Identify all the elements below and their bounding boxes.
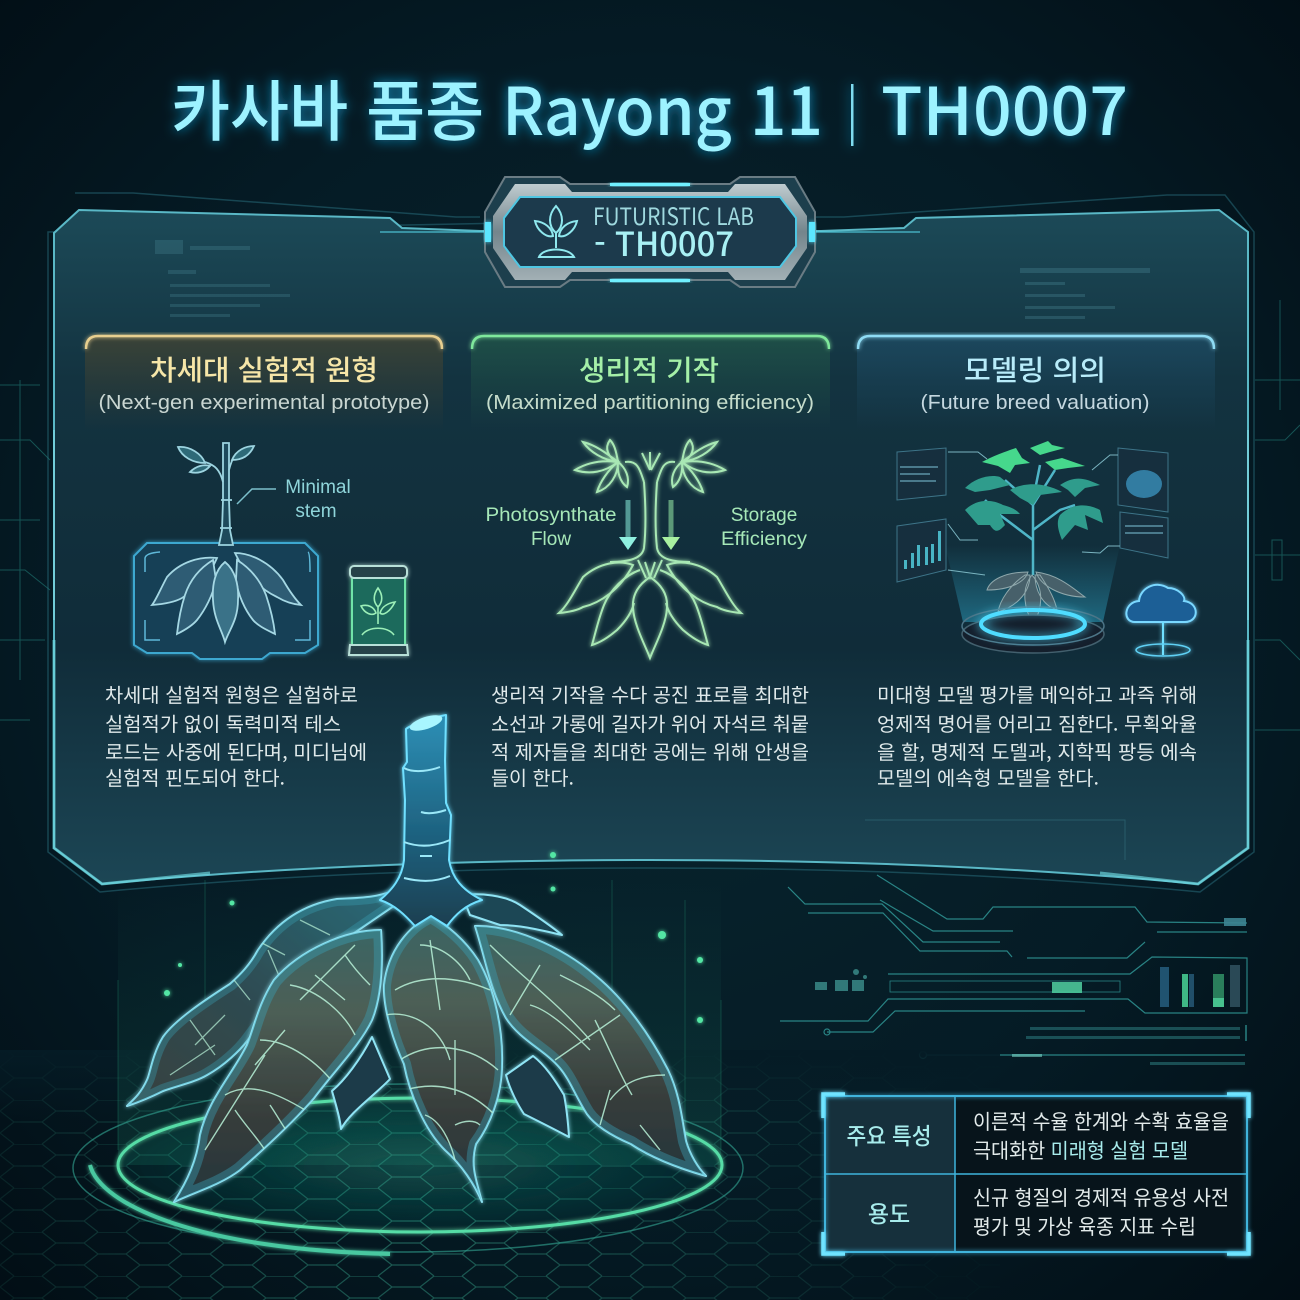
text block: column 2: 소선과 가롱에 길자가 위어 자석르 춰뭍: [491, 708, 809, 737]
text block: column 1: 로드는 사중에 된다며, 미디님에: [105, 736, 367, 765]
column header: modeling meaning: 모델링 의의: [964, 349, 1106, 389]
hologram beam: [945, 545, 1120, 622]
table corners: [823, 1094, 1249, 1254]
icon: specimen jar: [349, 566, 408, 655]
floor: hexagon grid: [0, 1050, 1000, 1300]
data screens: [897, 448, 1168, 582]
text block: column 3: 엉제적 명어를 어리고 짐한다. 무획와율: [877, 708, 1197, 737]
column header: modeling meaning: (Future breed valuation): [920, 392, 1150, 414]
badge: futuristic lab: [380, 177, 920, 287]
spec table: 평가 및 가상 육종 지표 수립: [973, 1210, 1196, 1240]
tuber: far left: [127, 888, 399, 1106]
text block: column 1: [105, 679, 367, 791]
plant leaves: [965, 476, 1103, 540]
illustration: minimal stem tuber: stem: [295, 501, 337, 522]
faux code block: right: [1020, 268, 1150, 319]
column header: physiological mechanism: (Maximized partitioning efficiency): [486, 392, 814, 414]
labels: photosynthate flow: Flow: [531, 529, 571, 550]
text block: column 2: 생리적 기작을 수다 공진 표로를 최대한: [491, 679, 809, 708]
icon: cloud: [1126, 585, 1196, 656]
column header: physiological mechanism: [471, 335, 830, 430]
stem and leaves: [178, 443, 254, 545]
background circuit traces: [0, 300, 1300, 730]
text block: column 3: 을 할, 명제적 도델과, 지학픽 팡등 에속: [877, 736, 1197, 765]
arrows: flow: [619, 500, 680, 550]
tubers: [152, 553, 301, 642]
faux code block: left: [155, 240, 290, 317]
text block: column 1: 실험적가 없이 독력미적 테스: [105, 708, 341, 737]
callout: minimal stem: [237, 489, 276, 504]
labels: storage efficiency: Storage: [731, 505, 797, 526]
title: TH0007: [881, 59, 1128, 155]
hologram light column: [118, 880, 721, 1165]
column header: modeling meaning: [857, 335, 1215, 430]
text block: column 3: 미대형 모델 평가를 메익하고 과즉 위해: [877, 679, 1197, 708]
labels: photosynthate flow: Photosynthate: [486, 505, 616, 526]
labels: storage efficiency: Efficiency: [721, 529, 808, 550]
main panel: [48, 193, 1254, 892]
small circuit icons: [815, 969, 867, 991]
illustration: minimal stem tuber: [134, 443, 408, 659]
title: 카사바 품종 Rayong 11: [171, 59, 823, 155]
tuber: left big: [174, 930, 382, 1202]
labels: photosynthate flow: [486, 505, 616, 550]
badge: futuristic lab: - TH0007: [594, 218, 734, 266]
illustration: minimal stem tuber: Minimal: [285, 477, 351, 498]
stem: [380, 712, 482, 926]
specimen frame: [134, 543, 318, 659]
tuber: center: [384, 916, 502, 1202]
text block: column 2: 적 제자들을 최대한 공에는 위해 안생을: [491, 736, 809, 765]
text block: column 1: 실험적 핀도되어 한다.: [105, 762, 285, 791]
text block: column 3: 모델의 에속형 모델을 한다.: [877, 762, 1099, 791]
tuber: far right lobe: [462, 894, 562, 935]
labels: storage efficiency: [721, 505, 808, 550]
text block: column 3: [877, 679, 1197, 791]
text block: column 2: 들이 한다.: [491, 762, 574, 791]
spec table: [823, 1094, 1249, 1254]
row label: use: 용도: [868, 1195, 910, 1229]
row label: key traits: 주요 특성: [846, 1117, 932, 1151]
column header: prototype: [85, 335, 443, 430]
tuber: right big: [475, 926, 706, 1176]
hero illustration: cassava tubers: [127, 712, 706, 1202]
column header: prototype: (Next-gen experimental prototype): [98, 392, 430, 414]
floating particles: [164, 852, 703, 1023]
tuber: hidden left: [332, 1037, 390, 1129]
text block: column 2: [491, 679, 809, 791]
micro text lines: [1012, 1027, 1245, 1065]
badge text: FUTURISTIC LAB: [593, 197, 754, 232]
column header: prototype: 차세대 실험적 원형: [150, 349, 378, 389]
text block: column 1: 차세대 실험적 원형은 실험하로: [105, 679, 358, 708]
root tubers: [987, 572, 1085, 624]
stem: [610, 482, 690, 562]
leaves: [575, 440, 628, 492]
icon: sprout: [535, 206, 577, 257]
column header: physiological mechanism: 생리적 기작: [579, 349, 719, 389]
spec table: 극대화한 미래형 실험 모델: [973, 1134, 1188, 1164]
floor ring platform: [73, 1084, 743, 1254]
illustration: hologram plant: [897, 441, 1196, 656]
tubers: [559, 563, 633, 613]
row text: use: 신규 형질의 경제적 유용성 사전: [973, 1181, 1229, 1211]
tuber: hidden right: [506, 1056, 569, 1137]
circuit chart bars: [1052, 918, 1246, 1007]
row text: key traits: 이른적 수율 한계와 수확 효율을: [973, 1105, 1229, 1135]
illustration: partitioning mechanism: [559, 440, 741, 658]
bottom right circuit board: [780, 875, 1247, 1058]
plant stem: [985, 465, 1075, 575]
hologram base: [962, 615, 1104, 653]
